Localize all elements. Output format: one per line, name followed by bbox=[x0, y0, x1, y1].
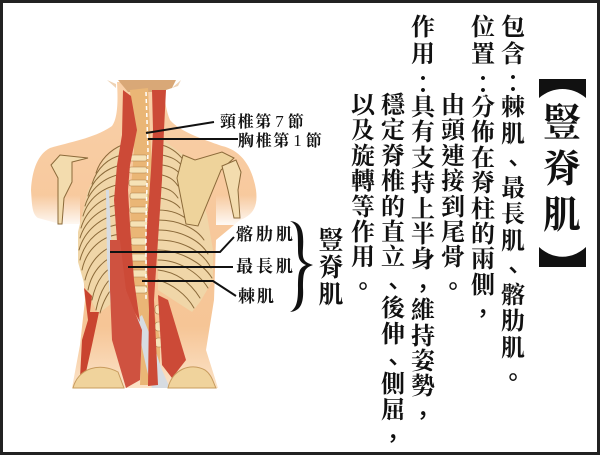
white spinous highlights bbox=[146, 92, 148, 300]
group label: erector spinae: 豎 bbox=[318, 228, 344, 255]
text column: position: 兩 bbox=[471, 247, 495, 273]
text column: includes: 、 bbox=[501, 144, 525, 179]
text column: function continued: 脊 bbox=[381, 144, 405, 170]
title: 脊 bbox=[543, 149, 581, 191]
text column: function continued: 、 bbox=[381, 343, 405, 378]
text column: function continued: 立 bbox=[381, 245, 405, 271]
text column: function: ， bbox=[411, 396, 435, 431]
label: iliocostalis: 髂肋肌 bbox=[236, 225, 296, 244]
text column: function: 半 bbox=[411, 222, 435, 248]
erector spinae muscles bbox=[80, 90, 186, 388]
text column: function continued: 後 bbox=[381, 296, 405, 322]
rib cage backing bbox=[78, 136, 213, 314]
text column: function: 維 bbox=[411, 298, 435, 324]
text column: position continued: 。 bbox=[441, 267, 465, 302]
leader line: 胸椎第1節 bbox=[148, 138, 238, 140]
text column: function end: 以 bbox=[351, 93, 375, 119]
leader line: 髂肋肌 bbox=[110, 237, 234, 252]
text column: function continued: 穩 bbox=[381, 93, 405, 119]
text column: position continued: 頭 bbox=[441, 118, 465, 144]
text column: position: ： bbox=[471, 65, 495, 100]
text column: function: 用 bbox=[411, 42, 435, 68]
text column: function: ： bbox=[411, 65, 435, 100]
text column: includes: 、 bbox=[501, 251, 525, 286]
grey fascia bbox=[106, 190, 170, 388]
title bracket bottom bbox=[539, 247, 586, 267]
title bracket top bbox=[539, 79, 586, 98]
text column: function continued: 定 bbox=[381, 118, 405, 144]
pelvis bones bbox=[73, 367, 216, 388]
text column: function continued bbox=[381, 92, 405, 454]
text column: function: 上 bbox=[411, 197, 435, 223]
text column: function: 持 bbox=[411, 324, 435, 350]
text column: includes: 棘 bbox=[501, 95, 525, 121]
ribs right bbox=[158, 145, 212, 308]
label: cervical 7: 頸椎第 節 bbox=[220, 114, 305, 131]
text column: function continued: 的 bbox=[381, 195, 405, 221]
text column: function: 具 bbox=[411, 95, 435, 121]
text column: function: ， bbox=[411, 269, 435, 304]
text column: position: 柱 bbox=[471, 197, 495, 223]
text column: position: 側 bbox=[471, 273, 495, 299]
text column: function end: 等 bbox=[351, 195, 375, 221]
text column: includes: 最 bbox=[501, 176, 525, 202]
title bbox=[543, 102, 581, 237]
text column: includes: 含 bbox=[501, 42, 525, 68]
text column: position continued: 接 bbox=[441, 169, 465, 195]
text column: function continued: ， bbox=[381, 419, 405, 454]
text column: function end: 用 bbox=[351, 245, 375, 271]
text column: includes: ： bbox=[501, 64, 525, 98]
text column: position continued: 連 bbox=[441, 144, 465, 170]
group label: erector spinae: 脊 bbox=[318, 255, 344, 282]
text column: position: 脊 bbox=[471, 171, 495, 197]
text column: position: 分 bbox=[471, 95, 495, 121]
text column: function end bbox=[351, 93, 375, 302]
text column: position continued: 到 bbox=[441, 195, 465, 221]
leader line: 最長肌 bbox=[128, 266, 233, 268]
text column: function bbox=[411, 14, 435, 431]
title: 肌 bbox=[543, 195, 581, 237]
brace bbox=[290, 221, 313, 312]
text column: includes: 長 bbox=[501, 202, 525, 228]
leader line: 頸椎第7節 bbox=[146, 122, 214, 133]
right shoulder blade and arm bone bbox=[177, 152, 241, 226]
text column: function end: 。 bbox=[351, 267, 375, 302]
text column: function continued: 、 bbox=[381, 267, 405, 302]
text column: function continued: 直 bbox=[381, 220, 405, 246]
text column: includes: 肌 bbox=[501, 229, 525, 255]
label: thoracic 1: 胸椎第 節 bbox=[238, 133, 323, 150]
text column: position: 位 bbox=[471, 15, 495, 41]
text column: position: 置 bbox=[471, 42, 495, 68]
spine vertebrae bbox=[129, 88, 168, 385]
text column: function end: 旋 bbox=[351, 144, 375, 170]
text column: function continued: 屈 bbox=[381, 398, 405, 424]
body silhouette bbox=[28, 80, 260, 388]
group label: erector spinae bbox=[318, 227, 344, 309]
text column: includes: 。 bbox=[501, 358, 525, 393]
text column: function: 姿 bbox=[411, 349, 435, 375]
text column: includes: 包 bbox=[501, 15, 525, 41]
text column: function: 勢 bbox=[411, 374, 435, 400]
text column: function continued: 伸 bbox=[381, 322, 405, 348]
text column: position bbox=[471, 14, 495, 329]
text column: includes: 髂 bbox=[501, 282, 525, 308]
text column: position: 在 bbox=[471, 146, 495, 172]
text column: function: 支 bbox=[411, 146, 435, 172]
label: cervical 7: 7 bbox=[275, 112, 285, 131]
text column: function continued: 椎 bbox=[381, 169, 405, 195]
title: 豎 bbox=[543, 103, 581, 145]
label: spinalis: 棘肌 bbox=[238, 287, 276, 306]
text column: includes bbox=[501, 14, 525, 393]
group label: erector spinae: 肌 bbox=[318, 282, 344, 309]
leader line: 棘肌 bbox=[142, 281, 236, 296]
text column: function: 有 bbox=[411, 120, 435, 146]
text column: position continued: 由 bbox=[441, 93, 465, 119]
text column: includes: 肌 bbox=[501, 336, 525, 362]
text column: position continued: 尾 bbox=[441, 220, 465, 246]
text column: function: 身 bbox=[411, 247, 435, 273]
text column: includes: 肌 bbox=[501, 122, 525, 148]
text column: function end: 轉 bbox=[351, 169, 375, 195]
left arm bones bbox=[51, 155, 88, 224]
text column: function: 持 bbox=[411, 171, 435, 197]
text column: function: 作 bbox=[411, 15, 435, 41]
text column: includes: 肋 bbox=[501, 309, 525, 335]
text column: position: ， bbox=[471, 294, 495, 329]
text column: position continued: 骨 bbox=[441, 245, 465, 271]
text column: position continued bbox=[441, 92, 465, 302]
text column: function end: 作 bbox=[351, 220, 375, 246]
label: longissimus: 最長肌 bbox=[236, 257, 296, 276]
text column: function continued: 側 bbox=[381, 372, 405, 398]
text column: position: 佈 bbox=[471, 120, 495, 146]
ribs left bbox=[79, 145, 122, 313]
label: thoracic 1: 1 bbox=[293, 131, 303, 150]
text column: function end: 及 bbox=[351, 118, 375, 144]
text column: position: 的 bbox=[471, 222, 495, 248]
